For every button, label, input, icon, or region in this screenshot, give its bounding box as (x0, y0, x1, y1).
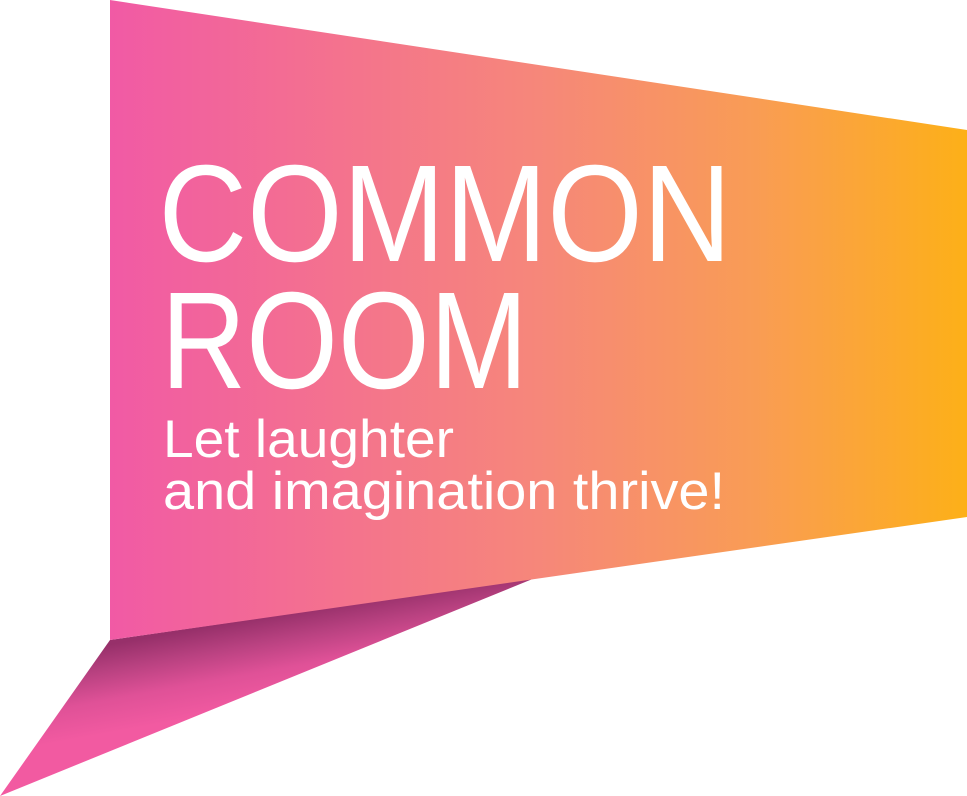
tagline: Let laughter (163, 410, 454, 469)
folded ribbon shadow (0, 578, 535, 796)
tagline (163, 410, 725, 521)
tagline: and imagination thrive! (163, 462, 725, 521)
banner panel (110, 0, 967, 640)
title: COMMON (158, 137, 732, 291)
title: ROOM (161, 264, 528, 418)
title (158, 137, 732, 418)
